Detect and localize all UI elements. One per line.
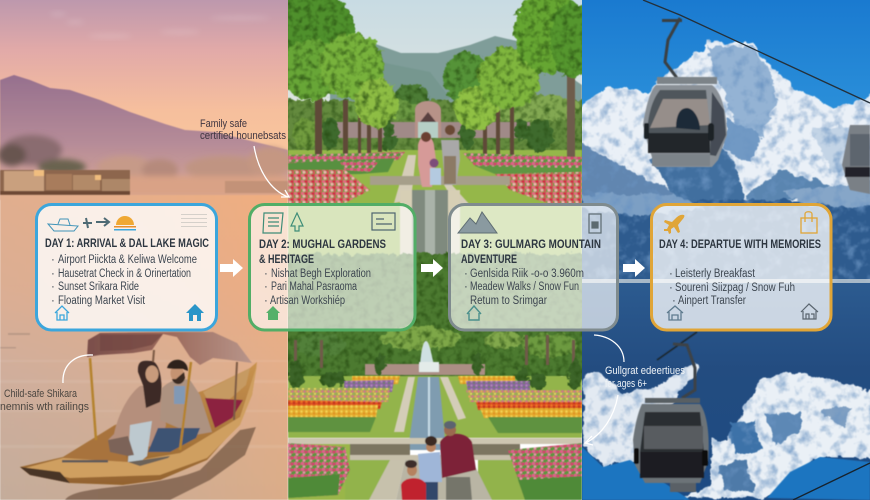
activities: · — [51, 254, 55, 266]
callout: Gulmarg adventures — [585, 335, 685, 445]
arrow: day 3 to day 4 — [623, 259, 645, 277]
activities — [51, 254, 197, 307]
card: Day 4 — [652, 204, 831, 330]
callout: Gulmarg adventures: fer ages 6+ — [605, 378, 647, 390]
icon: plane — [664, 215, 684, 234]
activities: Genlsida Riik -o-o 3.960m — [470, 268, 584, 280]
shikara reflection — [65, 427, 256, 500]
card: Day 3 — [450, 204, 618, 330]
arrow: day 1 to day 2 — [220, 259, 243, 277]
heading — [259, 239, 386, 266]
activities: Sunset Srikara Ride — [58, 281, 139, 293]
activities: Retum to Srimgar — [470, 295, 547, 307]
reflected gondola — [633, 332, 709, 492]
activities: · — [264, 281, 268, 293]
icon: ornament tree — [291, 213, 303, 231]
icon: home left — [667, 306, 683, 320]
activities: · — [51, 281, 55, 293]
activities: · — [464, 268, 468, 280]
activities — [264, 268, 371, 307]
callout: family safe houseboats: certified hounebsats — [200, 130, 286, 142]
tulip beds lower — [352, 376, 400, 386]
shikara boat with couple — [20, 332, 257, 485]
icon: home solid — [186, 304, 204, 321]
activities — [464, 268, 584, 307]
icon: souvenir bag — [801, 212, 817, 233]
heading: DAY 1: ARRIVAL & DAL LAKE MAGIC — [45, 238, 209, 250]
lower left and right tulips — [288, 443, 350, 498]
hazy treeline — [0, 135, 292, 196]
icon: boat, plane, sun — [48, 216, 136, 231]
activities: Ainpert Transfer — [678, 295, 746, 307]
icon: ticket — [589, 214, 601, 233]
partial gondola at edge — [842, 125, 870, 194]
icon: home right — [801, 304, 818, 319]
card: Day 1 — [36, 204, 216, 330]
activities: · — [264, 268, 268, 280]
callout: Gulmarg adventures: Gullgrat edeertiues — [605, 365, 685, 377]
activities: Sourenì Siizpag / Snow Fuh — [675, 282, 795, 294]
callout: family safe houseboats: Family safe — [200, 118, 247, 130]
callout: child-safe shikara: nemnis wth railings — [0, 401, 89, 413]
heading: ADVENTURE — [461, 254, 517, 266]
icon: teal home — [467, 306, 481, 320]
icon: home outline — [55, 306, 69, 320]
activities: Hausetrat Check in & Orinertation — [58, 268, 191, 280]
panel: Dal Lake sunset photo — [0, 0, 292, 500]
stone cross paths and canal — [394, 377, 415, 432]
canopy — [87, 332, 252, 365]
callout: child-safe shikara — [0, 355, 93, 413]
activities: Airport Piickta & Keliwa Welcome — [58, 254, 197, 266]
icon: mountains — [458, 212, 497, 233]
icon: scroll — [263, 213, 283, 233]
activities: Pari Mahal Pasraoma — [271, 281, 357, 293]
activities: · — [264, 295, 268, 307]
callout: child-safe shikara: Child-safe Shikara — [4, 388, 78, 400]
activities: · — [669, 268, 673, 280]
family in upper garden — [418, 125, 460, 187]
panel: Gulmarg snow mountain photo — [575, 0, 870, 500]
red cushions — [205, 398, 243, 428]
arrow: day 2 to day 3 — [421, 259, 443, 277]
activities — [669, 268, 795, 307]
activities: · — [51, 295, 55, 307]
activities: · — [672, 295, 676, 307]
activities: Floating Market Visit — [58, 295, 146, 307]
trees — [288, 0, 582, 131]
activities: · — [464, 281, 468, 293]
activities: Meadew Walks / Snow Fun — [470, 281, 579, 293]
activities: Leisterly Breakfast — [675, 268, 756, 280]
activities: Nishat Begh Exploration — [271, 268, 371, 280]
icon: certificate — [372, 213, 395, 230]
houseboats — [0, 170, 130, 198]
activities: Artisan Workshiép — [270, 295, 345, 307]
card: Day 2 — [250, 204, 415, 330]
heading: DAY 2: MUGHAL GARDENS — [259, 239, 386, 251]
icon: green home — [266, 306, 280, 320]
panel: Mughal garden photo — [288, 0, 582, 500]
heading: & HERITAGE — [259, 254, 314, 266]
activities: · — [669, 282, 673, 294]
heading: DAY 3: GULMARG MOUNTAIN — [461, 239, 601, 251]
father and two children — [401, 421, 476, 500]
heading — [461, 239, 601, 266]
top gondola cable — [643, 0, 870, 103]
stone paths and canal — [394, 155, 416, 203]
lower garden backdrop — [280, 254, 590, 379]
hedges — [292, 117, 553, 152]
lake reflection — [582, 282, 870, 500]
main gondola — [643, 18, 727, 167]
activities: · — [51, 268, 55, 280]
heading: DAY 4: DEPARTUE WITH MEMORIES — [659, 239, 821, 251]
upper tulip beds — [288, 125, 582, 260]
couple — [108, 383, 166, 450]
decorative list lines — [181, 214, 207, 227]
callout: family safe houseboats — [200, 118, 289, 197]
